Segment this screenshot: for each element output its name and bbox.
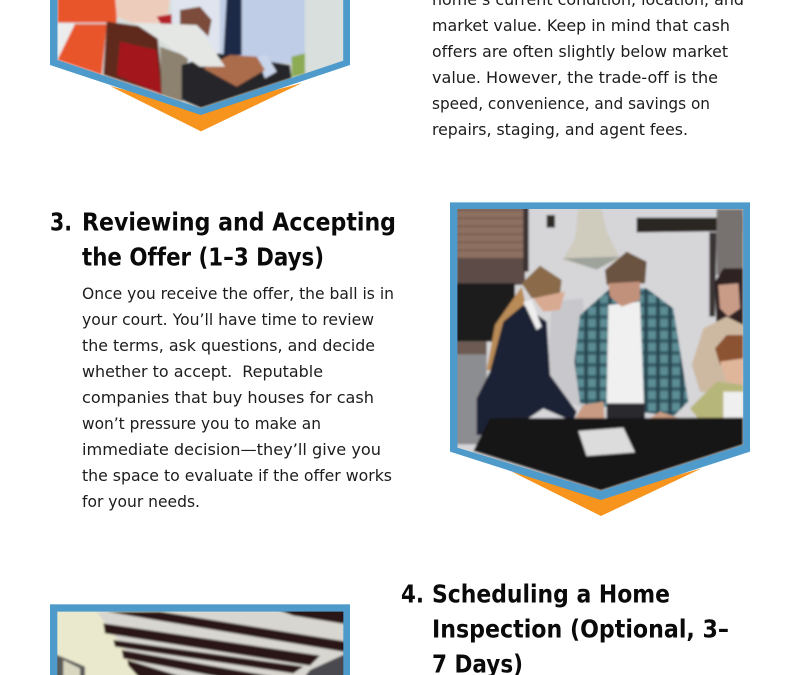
orange chevron [110, 83, 302, 131]
text block: step 3 description: whether to accept. Reputable [82, 362, 323, 381]
text block: step 2 description: value. However, the trade-off is the [432, 68, 718, 87]
heading: step 3: Reviewing and Accepting [82, 208, 396, 236]
heading: step 4: Scheduling a Home [432, 580, 670, 608]
text block: step 2 description: speed, convenience, and savings on [432, 94, 710, 113]
text block: step 3 description: your court. You’ll have time to review [82, 310, 374, 329]
heading: step 3: the Offer (1–3 Days) [82, 242, 324, 272]
photo: family signing document [453, 205, 747, 495]
photo: wooden ceiling beams [53, 608, 347, 675]
text block: step 3 description: won’t pressure you to make an [82, 414, 321, 433]
heading: step 3 [50, 208, 396, 272]
text block: step 2 description: offers are often slightly below market [432, 42, 728, 61]
text block: step 3 description: Once you receive the offer, the ball is in [82, 284, 394, 303]
heading: step 3: 3. [50, 208, 72, 236]
panel: step 3 photo [450, 202, 750, 516]
blue frame [50, 0, 350, 115]
text block: step 3 description: immediate decision—they’ll give you [82, 440, 381, 459]
panel: step 4 photo [50, 604, 350, 675]
text block: step 2 description: market value. Keep in mind that cash [432, 16, 730, 35]
text block: step 3 description: companies that buy houses for cash [82, 388, 374, 407]
text block: step 2 description [432, 0, 744, 139]
orange chevron [512, 468, 702, 516]
heading: step 4 [401, 580, 729, 675]
heading: step 4: 4. [401, 580, 424, 608]
heading: step 4: Inspection (Optional, 3– [432, 614, 729, 644]
panel: step 2 photo [50, 0, 350, 131]
blue frame [450, 202, 750, 500]
photo: agents reviewing paper [53, 0, 347, 113]
text block: step 2 description: repairs, staging, and agent fees. [432, 120, 688, 139]
blue frame [50, 604, 350, 675]
text block: step 3 description [82, 284, 394, 511]
text block: step 3 description: for your needs. [82, 492, 200, 511]
text block: step 3 description: the terms, ask questions, and decide [82, 336, 375, 355]
text block: step 3 description: the space to evaluate if the offer works [82, 466, 392, 485]
